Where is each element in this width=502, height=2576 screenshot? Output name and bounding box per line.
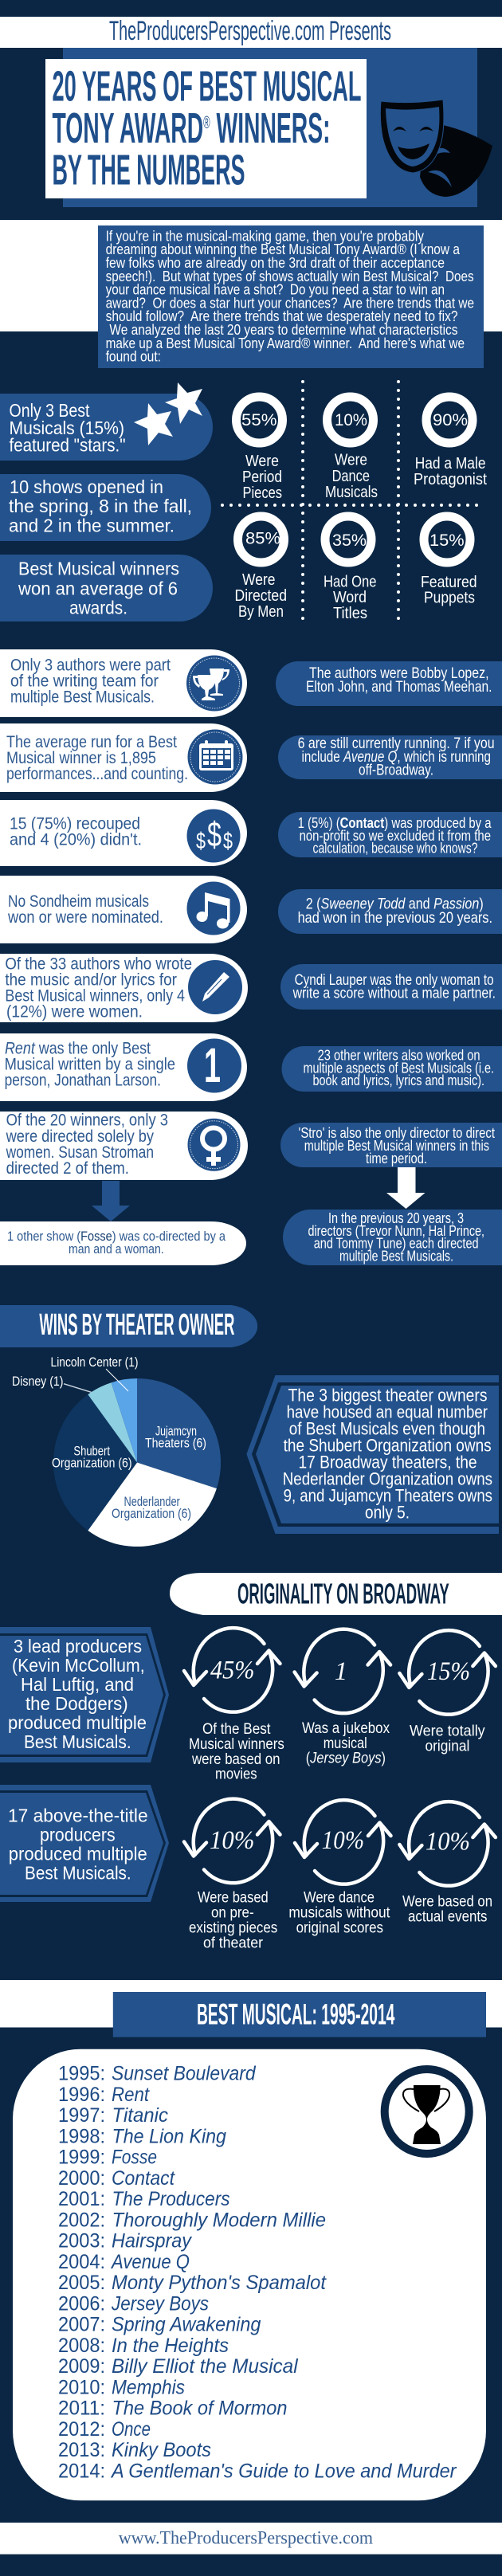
- stat: 10% pre-existing pieces: [184, 1799, 280, 1952]
- panel: average awards: awards.: [69, 598, 127, 618]
- heading: Best Musical 1995-2014: [113, 1992, 486, 2037]
- white band behind intro: [0, 220, 502, 331]
- pie chart: wins by owner: Organization (6): [112, 1506, 191, 1521]
- stat: 15% totally original: 15%: [427, 1657, 470, 1686]
- icon: cycle arrows: [184, 1799, 280, 1883]
- stat: 85% directed by men: Directed: [234, 586, 287, 605]
- stat: 10% dance musicals without scores: 10%: [322, 1826, 364, 1855]
- stat: 10% pre-existing pieces: existing pieces: [189, 1919, 278, 1937]
- stat: 85% directed by men: By Men: [238, 602, 284, 621]
- dotted grid dividers: [222, 382, 478, 620]
- panel: Sondheim detail: 2 (Sweeney Todd and Passion): [306, 896, 484, 913]
- panel: Stro: [280, 1123, 502, 1167]
- panel: intro text: few folks who are already on the 3rd draft of their acceptance: [106, 254, 445, 271]
- panel: authors: [0, 649, 247, 717]
- panel: Rent: Rent was the only Best: [5, 1039, 151, 1058]
- stat: 35% one word titles: Titles: [333, 604, 367, 622]
- title panel: [45, 48, 492, 207]
- pie chart: wins by owner: [12, 1355, 221, 1547]
- title: ®: [203, 112, 210, 132]
- pie chart: wins by owner: Disney (1): [12, 1374, 64, 1389]
- panel: opening seasons: and 2 in the summer.: [9, 516, 175, 536]
- footer: [0, 2523, 502, 2554]
- year list: 2014:: [58, 2460, 105, 2482]
- stat: 15% totally original: [399, 1630, 496, 1755]
- footer: www.TheProducersPerspective.com: [119, 2528, 373, 2548]
- stat: 10% pre-existing pieces: of theater: [203, 1935, 263, 1952]
- stat: 45% based on movies: were based on: [191, 1751, 280, 1768]
- panel: women authors: Best Musical winners, only 4: [5, 986, 185, 1006]
- panel: still running: [278, 735, 502, 779]
- stat: 10% actual events: 10%: [426, 1828, 470, 1857]
- stat: 10% dance musicals: 10%: [335, 411, 367, 429]
- panel: women authors: the music and/or lyrics for: [5, 970, 177, 990]
- panel: Fosse: [0, 1221, 246, 1265]
- year list: 2009:: [58, 2355, 105, 2378]
- year list: 2011:: [58, 2397, 105, 2419]
- stat: 90% male protagonist: 90%: [433, 411, 468, 429]
- year list: Monty Python's Spamalot: [112, 2272, 327, 2294]
- panel: opening seasons: [0, 474, 211, 541]
- year list: Avenue Q: [110, 2251, 190, 2273]
- panel: Rent: person, Jonathan Larson.: [5, 1071, 161, 1090]
- panel: average awards: won an average of 6: [18, 578, 178, 599]
- heading: wins by theater owner: [0, 1305, 257, 1347]
- stat: 85% directed by men: [234, 516, 287, 621]
- panel: intro text: found out:: [106, 348, 161, 365]
- arrow: white down: [386, 1167, 426, 1209]
- stat: 10% actual events: actual events: [408, 1907, 488, 1925]
- stat: 10% dance musicals without scores: [288, 1800, 390, 1937]
- panel: intro text: If you're in the musical-making game, then you're probably: [106, 227, 425, 244]
- year list: Titanic: [112, 2104, 168, 2127]
- slice: Disney: [88, 1382, 137, 1463]
- year list: 2000:: [58, 2167, 105, 2190]
- pie chart: wins by owner: Organization (6): [52, 1456, 132, 1471]
- callout: theater owners: 17 Broadway theaters, the: [298, 1452, 477, 1472]
- year list: Sunset Boulevard: [112, 2063, 257, 2085]
- icon: calendar: [188, 730, 242, 784]
- callout: theater owners: only 5.: [365, 1502, 410, 1522]
- year list: Thoroughly Modern Millie: [112, 2209, 326, 2231]
- year list: The Producers: [112, 2188, 229, 2210]
- year list: Billy Elliot the Musical: [112, 2355, 299, 2378]
- icon: music notes: [186, 881, 241, 935]
- panel: opening seasons: 10 shows opened in: [10, 476, 163, 497]
- panel: average awards: Best Musical winners: [18, 559, 179, 579]
- stat: 10% pre-existing pieces: Were based: [198, 1889, 269, 1907]
- stat: 15% totally original: Were totally: [410, 1722, 485, 1739]
- panel: Sondheim: won or were nominated.: [7, 908, 163, 927]
- icon: number one: [187, 1038, 241, 1093]
- callout: above-the-title producers: producers: [40, 1825, 116, 1845]
- stat: 35% one word titles: 35%: [332, 531, 367, 550]
- panel: intro text: [98, 225, 484, 368]
- icon: number one: 1: [204, 1038, 221, 1092]
- panel: average run: [0, 723, 247, 792]
- pie chart: wins by owner: Nederlander: [124, 1494, 180, 1509]
- panel: women authors: [0, 954, 248, 1022]
- year list: 1999:: [58, 2147, 105, 2169]
- stat: 10% dance musicals without scores: musicals without: [288, 1904, 390, 1922]
- year list: 2003:: [58, 2230, 105, 2253]
- year list: 2013:: [58, 2439, 105, 2461]
- year list: 2006:: [58, 2292, 105, 2315]
- panel: women directors: [0, 1111, 248, 1180]
- stat: 55% period pieces: Were: [245, 452, 279, 470]
- panel: women directors: women. Susan Stroman: [6, 1143, 154, 1162]
- pie chart: wins by owner: Shubert: [73, 1444, 110, 1459]
- panel: stars callout: featured "stars.": [10, 435, 126, 456]
- panel: average run: The average run for a Best: [6, 732, 177, 751]
- heading: wins by theater owner: WINS BY THEATER OWNER: [39, 1308, 234, 1342]
- callout: above-the-title producers: produced multiple: [9, 1844, 147, 1864]
- stat: 55% period pieces: Period: [242, 468, 282, 486]
- year list: The Lion King: [112, 2125, 226, 2147]
- panel: non-profit note: [278, 812, 502, 857]
- year list: Spring Awakening: [112, 2314, 261, 2336]
- year list: 1995:: [58, 2063, 105, 2085]
- stat: 1 jukebox musical: [295, 1629, 390, 1767]
- icon: dollar signs: $: [196, 829, 206, 854]
- panel: Rent: [0, 1033, 247, 1101]
- stat: 1 jukebox musical: 1: [335, 1657, 347, 1686]
- panel: women directors: Of the 20 winners, only 3: [6, 1111, 168, 1130]
- panel: recouped: and 4 (20%) didn't.: [10, 830, 142, 849]
- panel: women authors: Of the 33 authors who wrote: [5, 955, 192, 974]
- stat: 35% one word titles: [324, 516, 376, 622]
- year list: Once: [112, 2418, 151, 2441]
- year list: 2008:: [58, 2335, 105, 2357]
- stat: 55% period pieces: 55%: [241, 411, 277, 429]
- year list: 2004:: [58, 2251, 105, 2273]
- callout: above-the-title producers: Best Musicals.: [25, 1863, 131, 1884]
- stat: 15% puppets: [421, 516, 477, 607]
- stat: 10% dance musicals without scores: original scores: [296, 1919, 383, 1937]
- stat: 35% one word titles: Had One: [324, 573, 376, 591]
- icon: cycle arrows: [295, 1629, 390, 1713]
- panel: still running: off-Broadway.: [359, 762, 433, 779]
- icon: cycle arrows: [399, 1630, 496, 1715]
- stat: 35% one word titles: Word: [333, 588, 367, 606]
- callout: lead producers: produced multiple: [8, 1712, 147, 1733]
- icon: female symbol: [188, 1119, 241, 1171]
- stat: 10% dance musicals: [325, 397, 378, 501]
- stat: 10% actual events: [399, 1802, 496, 1925]
- panel: stars callout: Musicals (15%): [10, 418, 124, 438]
- panel: average run: Musical winner is 1,895: [6, 748, 156, 767]
- title: [53, 63, 362, 194]
- pie chart: wins by owner: Lincoln Center (1): [51, 1355, 139, 1370]
- year list: Contact: [112, 2167, 175, 2190]
- icon: pencil: [188, 960, 242, 1014]
- panel: authors detail: [276, 661, 502, 706]
- stat: 45% based on movies: movies: [215, 1766, 257, 1783]
- stat: 1 jukebox musical: (Jersey Boys): [306, 1750, 386, 1767]
- panel: previous directors: multiple Best Musicals.: [339, 1248, 453, 1264]
- stat: 90% male protagonist: Protagonist: [414, 470, 487, 488]
- panel: Cyndi Lauper: [280, 964, 502, 1010]
- callout: lead producers: the Dodgers): [25, 1693, 128, 1714]
- icon: dollar signs: $: [207, 815, 222, 854]
- stat: 45% based on movies: Of the Best: [202, 1720, 271, 1738]
- icon: dollar signs: $: [223, 829, 233, 854]
- stat: 55% period pieces: Pieces: [242, 484, 282, 502]
- year list: 2005:: [58, 2272, 105, 2294]
- year list: Jersey Boys: [111, 2292, 209, 2315]
- panel: stars callout: Only 3 Best: [10, 400, 90, 421]
- stat: 10% pre-existing pieces: on pre-: [211, 1904, 254, 1922]
- pie chart: wins by owner: Theaters (6): [145, 1436, 206, 1451]
- year list: In the Heights: [112, 2335, 229, 2357]
- year list: Fosse: [112, 2147, 157, 2169]
- panel: authors: of the writing team for: [10, 672, 159, 691]
- year list: The Book of Mormon: [112, 2397, 287, 2419]
- panel: recouped: 15 (75%) recouped: [10, 814, 140, 833]
- year list: Rent: [112, 2084, 150, 2106]
- callout: theater owners: [246, 1375, 499, 1534]
- panel: winners list: [13, 2049, 486, 2500]
- panel: opening seasons: the spring, 8 in the fall,: [9, 496, 192, 516]
- stat: 45% based on movies: Musical winners: [189, 1735, 284, 1753]
- slice: Nederlander: [88, 1463, 217, 1547]
- panel: Sondheim: No Sondheim musicals: [8, 892, 149, 911]
- stat: 85% directed by men: Were: [242, 570, 276, 589]
- callout: lead producers: (Kevin McCollum,: [12, 1655, 145, 1676]
- callout: lead producers: [0, 1627, 169, 1762]
- panel: recouped: [0, 800, 247, 866]
- stat: 10% dance musicals without scores: Were dance: [304, 1889, 375, 1907]
- slice: Lincoln Center: [112, 1378, 137, 1463]
- icon: dollar signs: [186, 810, 241, 862]
- year list: 2001:: [58, 2188, 105, 2210]
- year list: 1998:: [58, 2125, 105, 2147]
- panel: previous directors: In the previous 20 years, 3: [328, 1210, 464, 1226]
- callout: above-the-title producers: 17 above-the-title: [8, 1806, 148, 1826]
- stat: 45% based on movies: [184, 1628, 284, 1783]
- panel: average run: performances...and counting.: [6, 764, 188, 783]
- panel: Fosse: 1 other show (Fosse) was co-directed by a: [7, 1229, 226, 1244]
- year list: 1997:: [58, 2104, 105, 2127]
- stat: 90% male protagonist: [414, 397, 487, 488]
- icon: cycle arrows: [295, 1800, 390, 1884]
- callout: lead producers: Best Musicals.: [24, 1731, 131, 1752]
- panel: authors: multiple Best Musicals.: [10, 688, 155, 707]
- slice: Shubert: [53, 1394, 137, 1531]
- heading: originality on Broadway: [170, 1573, 502, 1615]
- stat: 45% based on movies: 45%: [210, 1657, 254, 1685]
- year list: 2012:: [58, 2418, 105, 2441]
- panel: stars callout: [0, 382, 213, 461]
- year list: Memphis: [112, 2376, 185, 2398]
- panel: women directors: were directed solely by: [6, 1127, 154, 1146]
- panel: previous directors: [283, 1210, 502, 1265]
- title: BY THE NUMBERS: [53, 147, 245, 194]
- panel: Sondheim detail: [278, 889, 502, 934]
- year list: Kinky Boots: [112, 2439, 211, 2461]
- icon: trophy: [186, 655, 242, 711]
- stat: 10% pre-existing pieces: 10%: [210, 1826, 254, 1855]
- stat: 10% dance musicals: Were: [335, 450, 367, 469]
- stat: 1 jukebox musical: musical: [324, 1735, 367, 1752]
- panel: women authors: (12%) were women.: [6, 1002, 143, 1021]
- title: WINNERS:: [210, 104, 330, 152]
- panel: women directors: directed 2 of them.: [6, 1159, 129, 1178]
- callout: lead producers: Hal Luftig, and: [21, 1674, 134, 1695]
- panel: Rent: Musical written by a single: [5, 1055, 175, 1074]
- year list: 2002:: [58, 2209, 105, 2231]
- arrow: blue down: [92, 1181, 130, 1221]
- year list: 2007:: [58, 2314, 105, 2336]
- stat: 55% period pieces: [236, 397, 282, 502]
- icon: cycle arrows: [184, 1628, 280, 1712]
- year list: A Gentleman's Guide to Love and Murder: [110, 2460, 457, 2482]
- stat: 85% directed by men: 85%: [245, 530, 280, 548]
- stat: 15% puppets: 15%: [429, 531, 465, 550]
- icon: cycle arrows: [399, 1802, 496, 1886]
- callout: lead producers: 3 lead producers: [14, 1636, 142, 1657]
- stat: 10% dance musicals: Musicals: [325, 483, 378, 501]
- white band behind list heading: [0, 1980, 502, 2027]
- panel: Stro: time period.: [366, 1150, 427, 1166]
- stat: 15% totally original: original: [426, 1737, 469, 1755]
- icon: stars: [134, 382, 202, 445]
- slice: Jujamcyn: [137, 1378, 221, 1488]
- callout: above-the-title producers: [0, 1785, 169, 1902]
- stat: 1 jukebox musical: Was a jukebox: [302, 1719, 390, 1737]
- icon: trophy badge: [385, 2069, 469, 2154]
- icon: theater masks: [380, 100, 492, 197]
- panel: other writers: [282, 1046, 502, 1092]
- panel: Sondheim: [0, 876, 247, 943]
- stat: 10% dance musicals: Dance: [332, 467, 370, 485]
- stat: 15% puppets: Featured: [421, 573, 477, 591]
- stat: 90% male protagonist: Had a Male: [415, 454, 486, 472]
- year list: 2010:: [58, 2376, 105, 2398]
- year list: Hairspray: [112, 2230, 192, 2253]
- stat: 15% puppets: Puppets: [424, 589, 475, 607]
- year list: 1996:: [58, 2084, 105, 2106]
- title: TONY AWARD: [53, 104, 341, 152]
- panel: average awards: [0, 555, 213, 621]
- year list: [58, 2063, 457, 2482]
- panel: authors: Only 3 authors were part: [10, 656, 171, 675]
- pie chart: wins by owner: Jujamcyn: [155, 1424, 197, 1439]
- panel: Fosse: man and a woman.: [69, 1241, 164, 1257]
